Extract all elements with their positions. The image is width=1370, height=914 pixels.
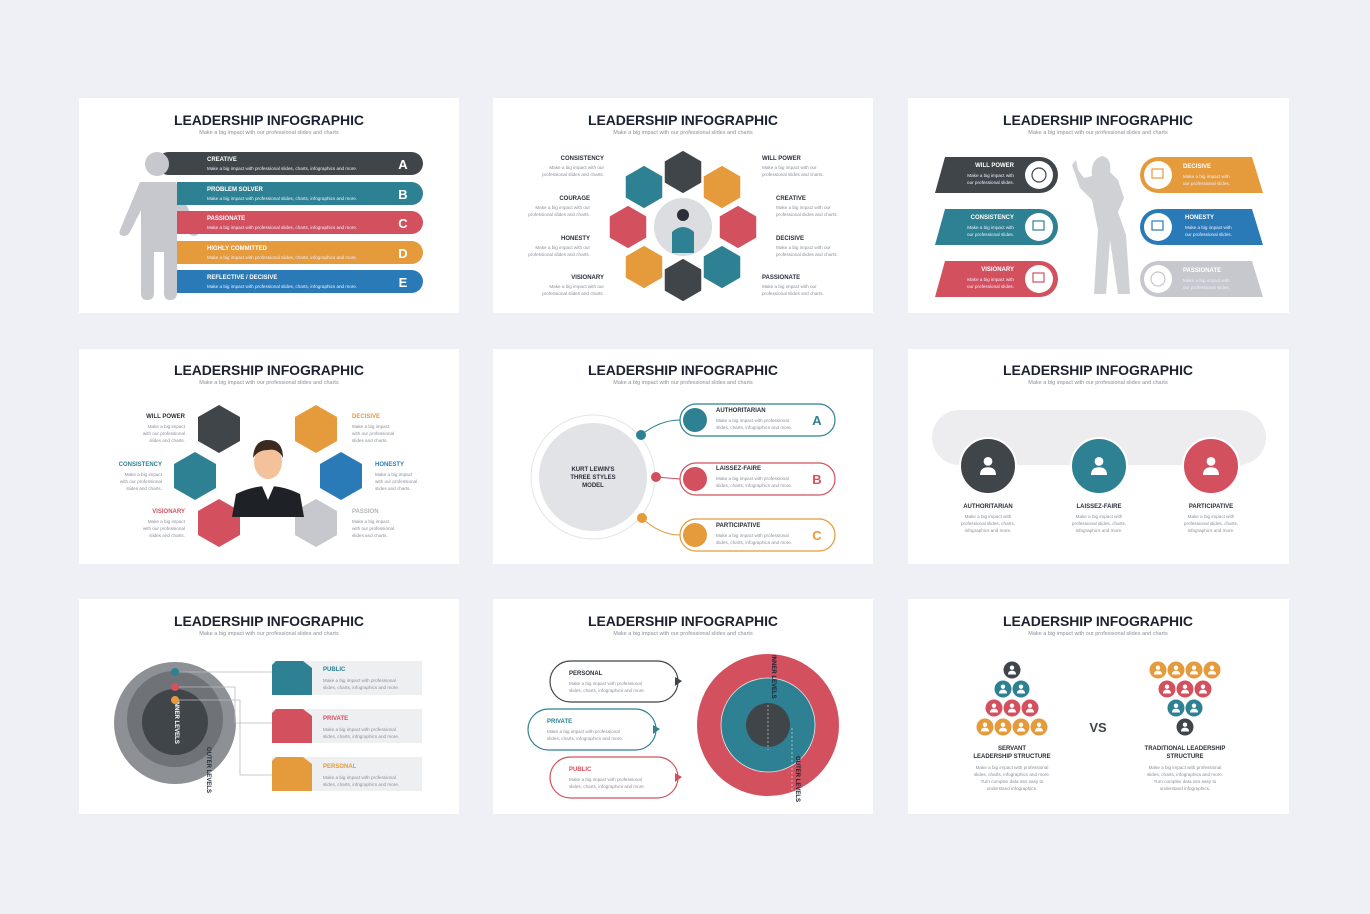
- box private: slides, charts, infographics and more.: [323, 734, 399, 739]
- labels right: Make a big impact: [352, 424, 390, 429]
- labels right: [352, 414, 417, 538]
- banner visionary: Make a big impact with: [967, 277, 1014, 282]
- box public: PUBLIC: [323, 667, 346, 673]
- title: LEADERSHIP INFOGRAPHIC: [174, 613, 364, 629]
- slide 2: hexagon flower: [493, 98, 873, 313]
- bar A creative: [157, 152, 423, 175]
- level labels: OUTER LEVELS: [794, 756, 800, 802]
- title: LEADERSHIP INFOGRAPHIC: [174, 362, 364, 378]
- labels: Make a big impact with: [965, 514, 1012, 519]
- pill laissez-faire: slides, charts, infographics and more.: [716, 483, 792, 488]
- banner will power: Make a big impact with: [967, 173, 1014, 178]
- bubble personal: PERSONAL: [569, 671, 603, 677]
- labels right: slides and charts.: [352, 533, 388, 538]
- labels: infographics and more.: [1188, 528, 1234, 533]
- model circle: KURT LEWIN'S: [571, 467, 615, 473]
- bar D: HIGHLY COMMITTED: [207, 246, 268, 252]
- labels: infographics and more.: [1076, 528, 1122, 533]
- subtitle: Make a big impact with our professional slides and charts: [1028, 631, 1168, 637]
- banner consistency: CONSISTENCY: [971, 215, 1014, 221]
- vs: VS: [1089, 720, 1107, 735]
- bar C: PASSIONATE: [207, 216, 245, 222]
- bar B: B: [398, 187, 408, 202]
- band: [932, 410, 1266, 465]
- labels right: with our professional: [375, 479, 417, 484]
- servant label: SERVANT: [998, 746, 1026, 752]
- subtitle: Make a big impact with our professional slides and charts: [1028, 380, 1168, 386]
- traditional label: [1145, 746, 1225, 791]
- level labels: [770, 655, 800, 802]
- banner passionate: Make a big impact with: [1183, 278, 1230, 283]
- title: LEADERSHIP INFOGRAPHIC: [588, 362, 778, 378]
- traditional pyramid: [1150, 662, 1220, 736]
- labels: PARTICIPATIVE: [1189, 504, 1233, 510]
- left labels: HONESTY: [561, 236, 590, 242]
- box private: Make a big impact with professional: [323, 727, 396, 732]
- left labels: professional slides and charts.: [528, 212, 590, 217]
- banner honesty: Make a big impact with: [1185, 225, 1232, 230]
- labels left: Make a big impact: [148, 424, 186, 429]
- labels right: DECISIVE: [352, 414, 380, 420]
- labels right: slides and charts.: [352, 438, 388, 443]
- labels left: VISIONARY: [152, 509, 185, 515]
- labels: [961, 504, 1238, 533]
- box public: slides, charts, infographics and more.: [323, 685, 399, 690]
- pill participative: slides, charts, infographics and more.: [716, 540, 792, 545]
- labels right: Make a big impact: [352, 519, 390, 524]
- pill participative: C: [812, 528, 822, 543]
- banner decisive: Make a big impact with: [1183, 174, 1230, 179]
- labels left: with our professional: [143, 431, 185, 436]
- pill participative: PARTICIPATIVE: [716, 523, 760, 529]
- labels left: with our professional: [120, 479, 162, 484]
- right labels: professional slides and charts.: [776, 212, 838, 217]
- labels right: Make a big impact: [375, 472, 413, 477]
- right labels: Make a big impact with our: [762, 284, 817, 289]
- petals: [609, 150, 757, 302]
- bar E: E: [399, 275, 408, 290]
- labels left: slides and charts.: [149, 438, 185, 443]
- servant label: slides, charts, infographics and more.: [974, 772, 1050, 777]
- slide 6: three styles circles: [908, 349, 1289, 564]
- pill laissez-faire: B: [812, 472, 822, 487]
- banner consistency: our professional slides.: [967, 232, 1014, 237]
- labels right: slides and charts.: [375, 486, 411, 491]
- outer label: OUTER LEVELS: [205, 747, 211, 793]
- circles: [960, 438, 1239, 494]
- labels left: slides and charts.: [126, 486, 162, 491]
- bubble public: slides, charts, infographics and more.: [569, 784, 645, 789]
- bar D: [177, 241, 423, 264]
- bar E: REFLECTIVE / DECISIVE: [207, 275, 277, 281]
- title: LEADERSHIP INFOGRAPHIC: [174, 112, 364, 128]
- right labels: DECISIVE: [776, 236, 804, 242]
- pill participative: Make a big impact with professional: [716, 533, 789, 538]
- bubble public: Make a big impact with professional: [569, 777, 642, 782]
- level labels: INNER LEVELS: [770, 655, 776, 699]
- subtitle: Make a big impact with our professional slides and charts: [199, 380, 339, 386]
- bar E: Make a big impact with professional slides, charts, infographics and more.: [207, 284, 357, 289]
- bar B: [177, 182, 423, 205]
- subtitle: Make a big impact with our professional slides and charts: [1028, 130, 1168, 136]
- labels: infographics and more.: [965, 528, 1011, 533]
- labels right: PASSION: [352, 509, 379, 515]
- right labels: [762, 156, 838, 296]
- labels: professional slides, charts,: [1072, 521, 1126, 526]
- traditional label: TRADITIONAL LEADERSHIP: [1145, 746, 1225, 752]
- title: LEADERSHIP INFOGRAPHIC: [588, 613, 778, 629]
- bubble personal: Make a big impact with professional: [569, 681, 642, 686]
- subtitle: Make a big impact with our professional slides and charts: [613, 380, 753, 386]
- model circle: THREE STYLES: [570, 475, 616, 481]
- bubble public: [550, 757, 682, 798]
- left labels: COURAGE: [559, 196, 590, 202]
- banner visionary: [935, 261, 1058, 297]
- left labels: professional slides and charts.: [528, 252, 590, 257]
- banner consistency: [935, 209, 1058, 245]
- banner honesty: [1140, 209, 1263, 245]
- title: LEADERSHIP INFOGRAPHIC: [1003, 613, 1193, 629]
- labels right: HONESTY: [375, 462, 404, 468]
- bubble private: PRIVATE: [547, 719, 572, 725]
- box personal: slides, charts, infographics and more.: [323, 782, 399, 787]
- banner honesty: HONESTY: [1185, 215, 1214, 221]
- servant label: Make a big impact with professional: [976, 765, 1048, 770]
- labels: LAISSEZ-FAIRE: [1076, 504, 1122, 510]
- banner honesty: our professional slides.: [1185, 232, 1232, 237]
- servant pyramid: [976, 662, 1048, 736]
- slide 1: bars with person: [79, 98, 459, 313]
- labels: AUTHORITARIAN: [963, 504, 1013, 510]
- silhouette: [1072, 156, 1130, 294]
- pill authoritarian: [680, 404, 835, 436]
- left labels: [528, 156, 604, 296]
- bar B: PROBLEM SOLVER: [207, 187, 264, 193]
- right labels: professional slides and charts.: [762, 172, 824, 177]
- banner will power: [935, 157, 1058, 193]
- bar A creative: CREATIVE: [207, 157, 237, 163]
- target: [697, 654, 839, 796]
- title: LEADERSHIP INFOGRAPHIC: [1003, 112, 1193, 128]
- bar E: [177, 270, 423, 293]
- right labels: Make a big impact with our: [762, 165, 817, 170]
- bar C: C: [398, 216, 408, 231]
- banner passionate: PASSIONATE: [1183, 268, 1221, 274]
- bar C: [177, 211, 423, 234]
- box public: Make a big impact with professional: [323, 678, 396, 683]
- traditional label: STRUCTURE: [1166, 754, 1204, 760]
- head: [145, 152, 169, 176]
- banner passionate: our professional slides.: [1183, 285, 1230, 290]
- servant label: Turn complex data into easy to: [981, 779, 1044, 784]
- box private: [272, 709, 422, 743]
- labels left: WILL POWER: [146, 414, 186, 420]
- subtitle: Make a big impact with our professional slides and charts: [199, 130, 339, 136]
- slide 3: banners with silhouette: [908, 98, 1289, 313]
- bar D: Make a big impact with professional slides, charts, infographics and more.: [207, 255, 357, 260]
- right labels: professional slides and charts.: [776, 252, 838, 257]
- slide 7: inner/outer levels: [79, 599, 459, 814]
- servant label: understand infographics.: [987, 786, 1037, 791]
- bubble private: [528, 709, 660, 750]
- bubble personal: [550, 661, 682, 702]
- box personal: [272, 757, 422, 791]
- right labels: WILL POWER: [762, 156, 802, 162]
- left labels: professional slides and charts.: [542, 172, 604, 177]
- pill authoritarian: Make a big impact with professional: [716, 418, 789, 423]
- labels right: with our professional: [352, 526, 394, 531]
- left labels: VISIONARY: [571, 275, 604, 281]
- manager figure: [232, 440, 304, 517]
- left labels: Make a big impact with our: [535, 205, 590, 210]
- box personal: PERSONAL: [323, 764, 357, 770]
- left labels: CONSISTENCY: [561, 156, 604, 162]
- bar A creative: Make a big impact with professional slides, charts, infographics and more.: [207, 166, 357, 171]
- servant label: [973, 746, 1051, 791]
- pill participative: [680, 519, 835, 551]
- bar C: Make a big impact with professional slides, charts, infographics and more.: [207, 225, 357, 230]
- labels right: with our professional: [352, 431, 394, 436]
- traditional label: slides, charts, infographics and more.: [1147, 772, 1223, 777]
- labels left: Make a big impact: [148, 519, 186, 524]
- right labels: Make a big impact with our: [776, 205, 831, 210]
- banner consistency: Make a big impact with: [967, 225, 1014, 230]
- box public: [272, 661, 422, 695]
- traditional label: Turn complex data into easy to: [1154, 779, 1217, 784]
- subtitle: Make a big impact with our professional slides and charts: [613, 130, 753, 136]
- slide 8: target rings: [493, 599, 873, 814]
- bubble private: slides, charts, infographics and more.: [547, 736, 623, 741]
- labels: professional slides, charts,: [961, 521, 1015, 526]
- pill laissez-faire: Make a big impact with professional: [716, 476, 789, 481]
- servant label: LEADERSHIP STRUCTURE: [973, 754, 1051, 760]
- banner passionate: [1140, 261, 1263, 297]
- banner decisive: our professional slides.: [1183, 181, 1230, 186]
- traditional label: understand infographics.: [1160, 786, 1210, 791]
- banner will power: WILL POWER: [975, 163, 1015, 169]
- model circle: [531, 415, 655, 539]
- labels: Make a big impact with: [1076, 514, 1123, 519]
- connectors: [175, 672, 272, 775]
- subtitle: Make a big impact with our professional slides and charts: [613, 631, 753, 637]
- slide 4: hexagons with manager: [79, 349, 459, 564]
- banner decisive: [1140, 157, 1263, 193]
- labels left: [119, 414, 186, 538]
- title: LEADERSHIP INFOGRAPHIC: [588, 112, 778, 128]
- right labels: Make a big impact with our: [776, 245, 831, 250]
- slide 9: servant vs traditional: [908, 599, 1289, 814]
- pill authoritarian: A: [812, 413, 822, 428]
- labels left: Make a big impact: [125, 472, 163, 477]
- bar D: D: [398, 246, 408, 261]
- labels: professional slides, charts,: [1184, 521, 1238, 526]
- concentric circles: INNER LEVELS: [173, 700, 179, 744]
- left labels: Make a big impact with our: [549, 284, 604, 289]
- title: LEADERSHIP INFOGRAPHIC: [1003, 362, 1193, 378]
- left labels: Make a big impact with our: [549, 165, 604, 170]
- hexagons: [174, 405, 362, 547]
- right labels: professional slides and charts.: [762, 291, 824, 296]
- person silhouette: [120, 182, 198, 300]
- labels left: slides and charts.: [149, 533, 185, 538]
- bar B: Make a big impact with professional slides, charts, infographics and more.: [207, 196, 357, 201]
- bubble personal: slides, charts, infographics and more.: [569, 688, 645, 693]
- banner visionary: our professional slides.: [967, 284, 1014, 289]
- left labels: professional slides and charts.: [542, 291, 604, 296]
- banner decisive: DECISIVE: [1183, 164, 1211, 170]
- box private: PRIVATE: [323, 716, 348, 722]
- right labels: CREATIVE: [776, 196, 806, 202]
- labels left: with our professional: [143, 526, 185, 531]
- pill laissez-faire: LAISSEZ-FAIRE: [716, 466, 761, 472]
- left labels: Make a big impact with our: [535, 245, 590, 250]
- bubble public: PUBLIC: [569, 767, 592, 773]
- subtitle: Make a big impact with our professional slides and charts: [199, 631, 339, 637]
- traditional label: Make a big impact with professional: [1149, 765, 1221, 770]
- banner visionary: VISIONARY: [981, 267, 1014, 273]
- bar A creative: A: [398, 157, 408, 172]
- pill authoritarian: slides, charts, infographics and more.: [716, 425, 792, 430]
- concentric circles: [114, 662, 236, 784]
- bubble private: Make a big impact with professional: [547, 729, 620, 734]
- right labels: PASSIONATE: [762, 275, 800, 281]
- center person circle: [654, 198, 712, 256]
- model circle: MODEL: [582, 483, 604, 489]
- box personal: Make a big impact with professional: [323, 775, 396, 780]
- labels: Make a big impact with: [1188, 514, 1235, 519]
- pill authoritarian: AUTHORITARIAN: [716, 408, 766, 414]
- pill laissez-faire: [680, 463, 835, 495]
- slide 5: Kurt Lewin model: [493, 349, 873, 564]
- banner will power: our professional slides.: [967, 180, 1014, 185]
- connectors: [641, 420, 680, 535]
- labels left: CONSISTENCY: [119, 462, 162, 468]
